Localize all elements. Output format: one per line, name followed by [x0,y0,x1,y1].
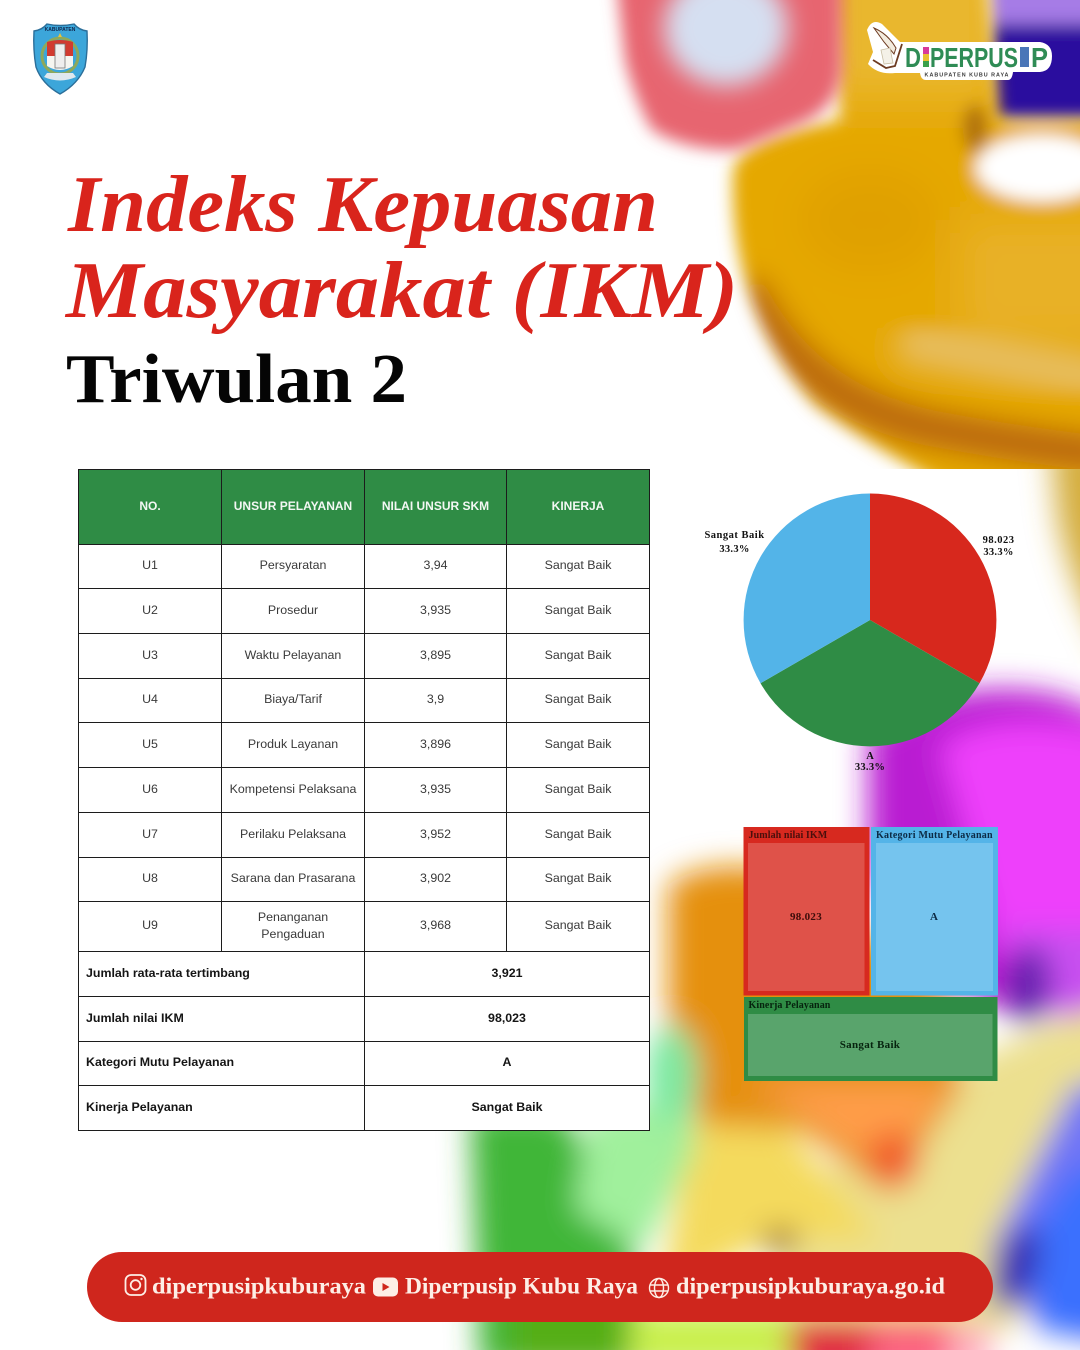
table: unsur pelayanan: U8 [142,871,158,885]
title [64,161,738,418]
table: unsur pelayanan: 3,968 [420,918,451,932]
table: unsur pelayanan: KINERJA [552,498,604,512]
table: unsur pelayanan: Sangat Baik [545,692,611,706]
table: unsur pelayanan: Sangat Baik [545,736,611,750]
treemap chart: A [930,911,938,923]
pie chart: Sangat Baik [704,530,765,541]
table: unsur pelayanan: Pengaduan [261,926,325,940]
table: unsur pelayanan: Jumlah rata-rata tertimbang [86,966,250,980]
pie chart: 33.3% [719,544,750,555]
table: unsur pelayanan: Sangat Baik [545,782,611,796]
table: unsur pelayanan: Sangat Baik [545,871,611,885]
table: unsur pelayanan: Sarana dan Prasarana [231,871,355,885]
logo: Diperpusip: D [905,42,921,73]
pie chart [704,494,1014,773]
table: unsur pelayanan: UNSUR PELAYANAN [234,498,352,512]
blurred background shapes [446,0,1080,1350]
footer bar: diperpusipkuburaya [152,1274,367,1298]
title: Triwulan 2 [66,341,407,418]
pie chart: 98.023 [983,535,1014,546]
table: unsur pelayanan: Sangat Baik [545,826,611,840]
table: unsur pelayanan: Sangat Baik [545,558,611,572]
logo: Kabupaten Kubu Raya crest [33,23,88,95]
footer bar: Diperpusip Kubu Raya [405,1274,638,1298]
table: unsur pelayanan: U7 [142,826,158,840]
table: unsur pelayanan: Jumlah nilai IKM [86,1010,184,1024]
table: unsur pelayanan: NO. [139,498,161,512]
table: unsur pelayanan: Penanganan [258,910,328,924]
pie chart: 33.3% [855,762,885,773]
table: unsur pelayanan: U4 [142,692,158,706]
table: unsur pelayanan: 3,895 [420,648,451,662]
table: unsur pelayanan: Sangat Baik [545,918,611,932]
pie chart: 33.3% [983,547,1014,558]
table: unsur pelayanan: U9 [142,918,158,932]
logo: Diperpusip: KABUPATEN KUBU RAYA [925,72,1009,78]
title: Masyarakat (IKM) [64,247,738,335]
table: unsur pelayanan: NILAI UNSUR SKM [382,498,489,512]
table: unsur pelayanan: 3,94 [423,558,448,572]
logo: Diperpusip: P [1031,42,1048,73]
treemap chart: Kategori Mutu Pelayanan [876,830,993,841]
title: Indeks Kepuasan [67,161,658,249]
table: unsur pelayanan: Prosedur [268,602,318,616]
table: unsur pelayanan: 3,902 [420,871,451,885]
table: unsur pelayanan: Sangat Baik [472,1100,542,1114]
pie chart: A [866,751,874,762]
table: unsur pelayanan: Sangat Baik [545,602,611,616]
table: unsur pelayanan: 3,935 [420,782,451,796]
treemap chart: Jumlah nilai IKM [748,830,828,841]
treemap chart: 98.023 [790,911,822,923]
table: unsur pelayanan: Perilaku Pelaksana [240,826,346,840]
table: unsur pelayanan: Produk Layanan [248,736,338,750]
table: unsur pelayanan: 3,935 [420,602,451,616]
table: unsur pelayanan: 3,896 [420,736,451,750]
table: unsur pelayanan: U1 [142,558,158,572]
table: unsur pelayanan: 3,952 [420,826,451,840]
table: unsur pelayanan [78,469,650,1131]
logo: Diperpusip [867,22,1052,80]
table: unsur pelayanan: 3,9 [427,692,444,706]
table: unsur pelayanan: Persyaratan [260,558,326,572]
logo: Diperpusip: PERPUS [930,42,1018,73]
table: unsur pelayanan: Kinerja Pelayanan [86,1100,193,1114]
table: unsur pelayanan: U3 [142,648,158,662]
treemap chart: Sangat Baik [840,1039,901,1051]
table: unsur pelayanan: Waktu Pelayanan [245,648,341,662]
table: unsur pelayanan: U6 [142,782,158,796]
table: unsur pelayanan: 3,921 [491,966,522,980]
table: unsur pelayanan: 98,023 [488,1010,526,1024]
table: unsur pelayanan: Kategori Mutu Pelayanan [86,1055,234,1069]
table: unsur pelayanan: U5 [142,736,158,750]
footer bar: diperpusipkuburaya.go.id [676,1274,945,1298]
logo: Kabupaten Kubu Raya crest: KABUPATEN [45,27,76,33]
table: unsur pelayanan: Sangat Baik [545,648,611,662]
table: unsur pelayanan: A [503,1055,511,1069]
table: unsur pelayanan: Biaya/Tarif [264,692,322,706]
table: unsur pelayanan: Kompetensi Pelaksana [230,782,356,796]
table: unsur pelayanan: U2 [142,602,158,616]
treemap chart: Kinerja Pelayanan [748,1000,831,1011]
